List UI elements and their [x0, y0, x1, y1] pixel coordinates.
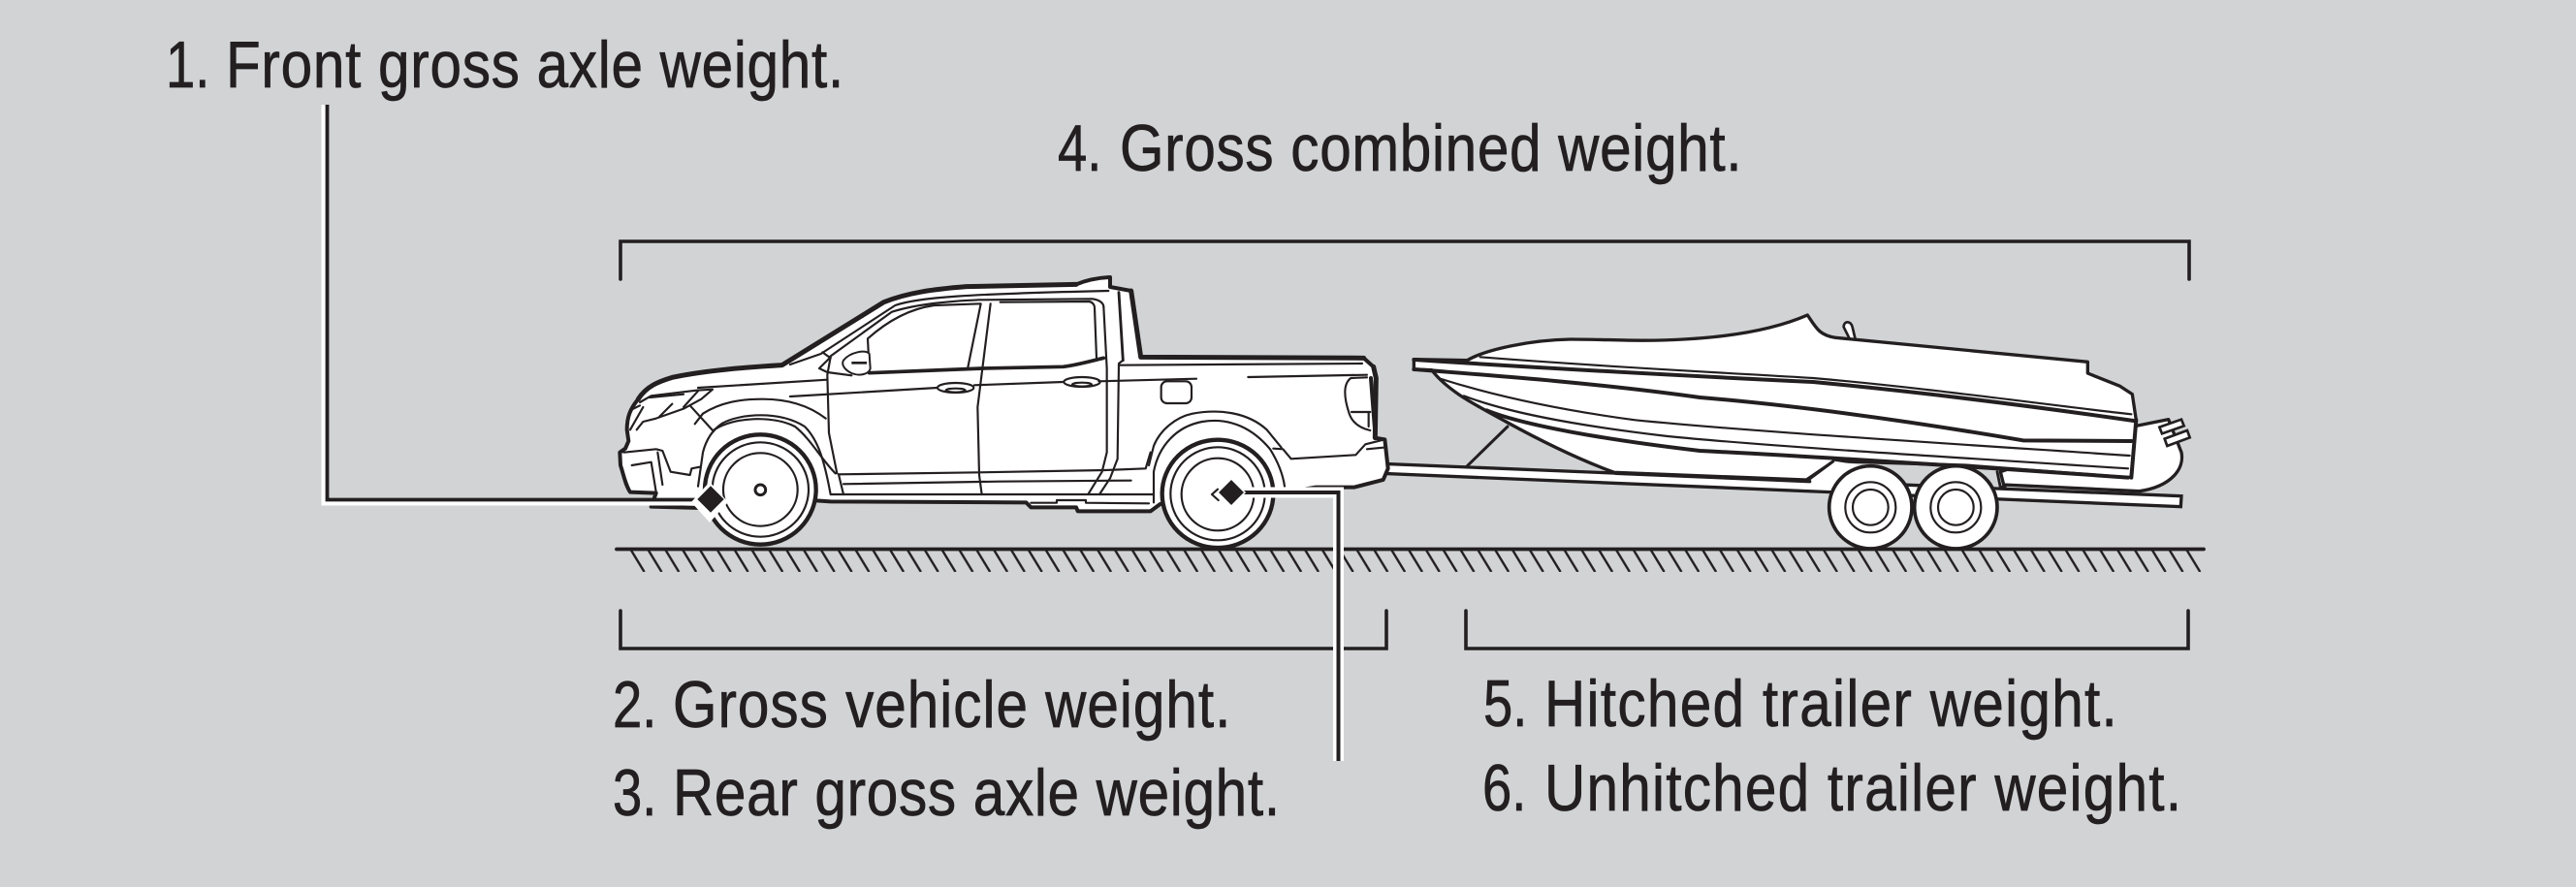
label 3: rear gross axle weight: 3.	[613, 756, 656, 830]
outboard motor	[2000, 420, 2181, 491]
label 2: gross vehicle weight: Gross vehicle weight.	[673, 669, 1230, 742]
window sill band	[870, 358, 1103, 373]
marker: front axle diamond	[691, 482, 728, 523]
hull to trailer support	[1806, 461, 1861, 491]
bracket: gross combined weight	[620, 241, 2189, 279]
label 6: unhitched trailer weight: Unhitched trailer weight.	[1544, 752, 2181, 825]
rear wheel	[1162, 440, 1273, 548]
bracket: gross vehicle weight	[620, 611, 1386, 649]
belt line and hood line	[698, 379, 1196, 396]
truck body silhouette	[620, 277, 1388, 511]
hull upper thick line	[1414, 369, 2131, 441]
gunwale thin line	[1480, 357, 2131, 414]
tail light	[1345, 377, 1375, 433]
rocker panel lines	[839, 453, 1154, 503]
label 1: front gross axle weight: 1.	[166, 28, 209, 102]
label 4: gross combined weight: 4.	[1058, 111, 1101, 185]
ground with hatching	[617, 549, 2204, 572]
motor propeller fins	[2159, 420, 2190, 446]
callout line: front axle	[324, 105, 710, 503]
label 6: unhitched trailer weight: 6.	[1482, 751, 1526, 825]
rear door window	[1001, 301, 1097, 358]
callout line: rear axle	[1231, 492, 1338, 761]
label 4: gross combined weight: Gross combined weight.	[1120, 112, 1742, 185]
front door window	[868, 303, 981, 370]
rear wheel arch	[1149, 412, 1285, 502]
stern edge	[2131, 420, 2136, 478]
trailer frame over boat edge	[1616, 473, 1810, 482]
label 5: hitched trailer weight: 5.	[1483, 667, 1527, 741]
windscreen post	[1844, 322, 1856, 340]
heavy roof and bed outline	[638, 284, 1376, 438]
pickup truck	[620, 277, 1388, 548]
door pillar	[982, 303, 991, 368]
label 2: gross vehicle weight: 2.	[613, 668, 656, 742]
boat on trailer	[1357, 315, 2190, 549]
windshield and roof lines	[790, 291, 1123, 364]
door handles	[938, 377, 1100, 393]
label 1: front gross axle weight: Front gross axle weight.	[226, 29, 843, 102]
boat hull and deck	[1414, 315, 2136, 480]
side mirror	[819, 352, 871, 375]
fuel door	[1161, 381, 1192, 403]
front wheel arch	[690, 399, 843, 494]
trailer bow stand	[1466, 427, 1508, 467]
hull thin line two	[1464, 396, 2128, 468]
door seams	[827, 307, 1367, 494]
rear bumper	[1273, 439, 1384, 459]
chine thick line	[1486, 410, 2128, 478]
headlight	[630, 390, 713, 429]
front bumper and fog lamp	[623, 449, 700, 491]
gunwale thick line	[1414, 360, 2134, 421]
front wheel	[705, 434, 816, 545]
trailer wheel front	[1829, 466, 1912, 549]
label 3: rear gross axle weight: Rear gross axle weight.	[673, 757, 1280, 830]
trailer wheel rear	[1915, 466, 1997, 549]
trailer drawbar and frame	[1357, 462, 2181, 507]
label 5: hitched trailer weight: Hitched trailer weight.	[1544, 668, 2117, 741]
bracket: trailer weight	[1466, 611, 2188, 649]
hull thin line one	[1438, 378, 2130, 456]
trailer bracket	[1997, 472, 2005, 488]
marker: rear axle diamond	[1218, 479, 1245, 506]
